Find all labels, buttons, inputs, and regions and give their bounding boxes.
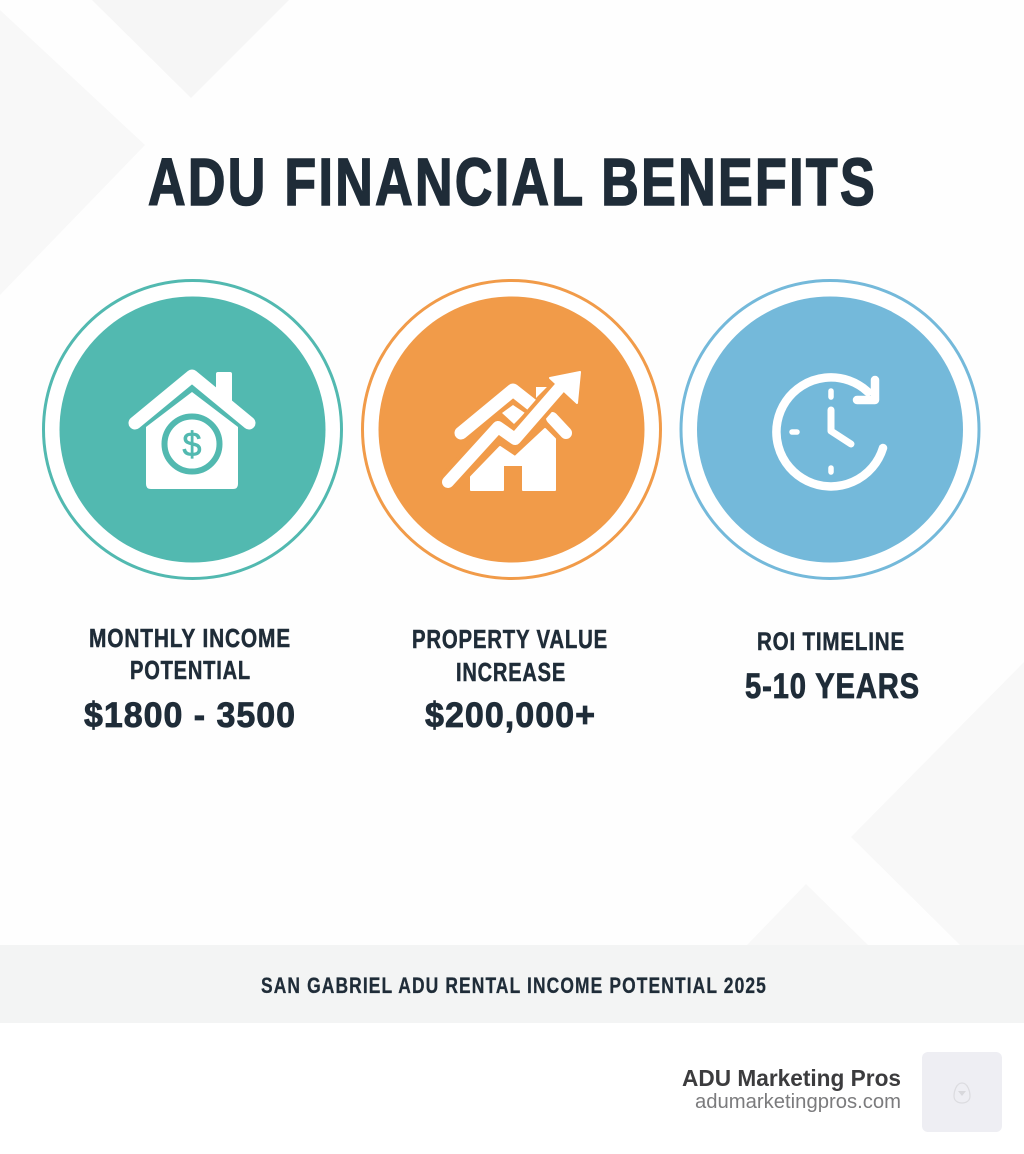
label: property value increase: INCREASE <box>456 659 566 687</box>
blue circle badge <box>681 280 979 578</box>
label: roi timeline: ROI TIMELINE <box>757 628 905 656</box>
icon: house with dollar: $ <box>183 426 202 464</box>
label: property value increase <box>412 626 608 687</box>
icon: house with dollar <box>135 372 249 489</box>
panel: roi timeline <box>681 280 979 706</box>
value: income range: $1800 - 3500 <box>84 696 296 735</box>
value: years: 5-10 YEARS <box>745 667 920 706</box>
footer url: adumarketingpros.com <box>695 1091 901 1113</box>
banner: SAN GABRIEL ADU RENTAL INCOME POTENTIAL 2025 <box>261 973 767 998</box>
icon: house with rising arrow <box>448 372 580 490</box>
logo placeholder <box>922 1052 1002 1132</box>
footer brand name: ADU Marketing Pros <box>682 1065 901 1091</box>
panel: property value <box>362 280 660 735</box>
label: property value increase: PROPERTY VALUE <box>412 626 608 654</box>
orange circle badge <box>362 280 660 578</box>
value: property increase: $200,000+ <box>425 696 596 735</box>
panel: monthly income <box>44 280 342 735</box>
label: monthly income potential <box>89 625 291 685</box>
teal circle badge <box>44 280 342 578</box>
label: monthly income potential: MONTHLY INCOME <box>89 625 291 653</box>
banner <box>0 945 1024 1023</box>
label: monthly income potential: POTENTIAL <box>130 657 251 685</box>
icon: clock with circular arrow <box>776 377 883 486</box>
